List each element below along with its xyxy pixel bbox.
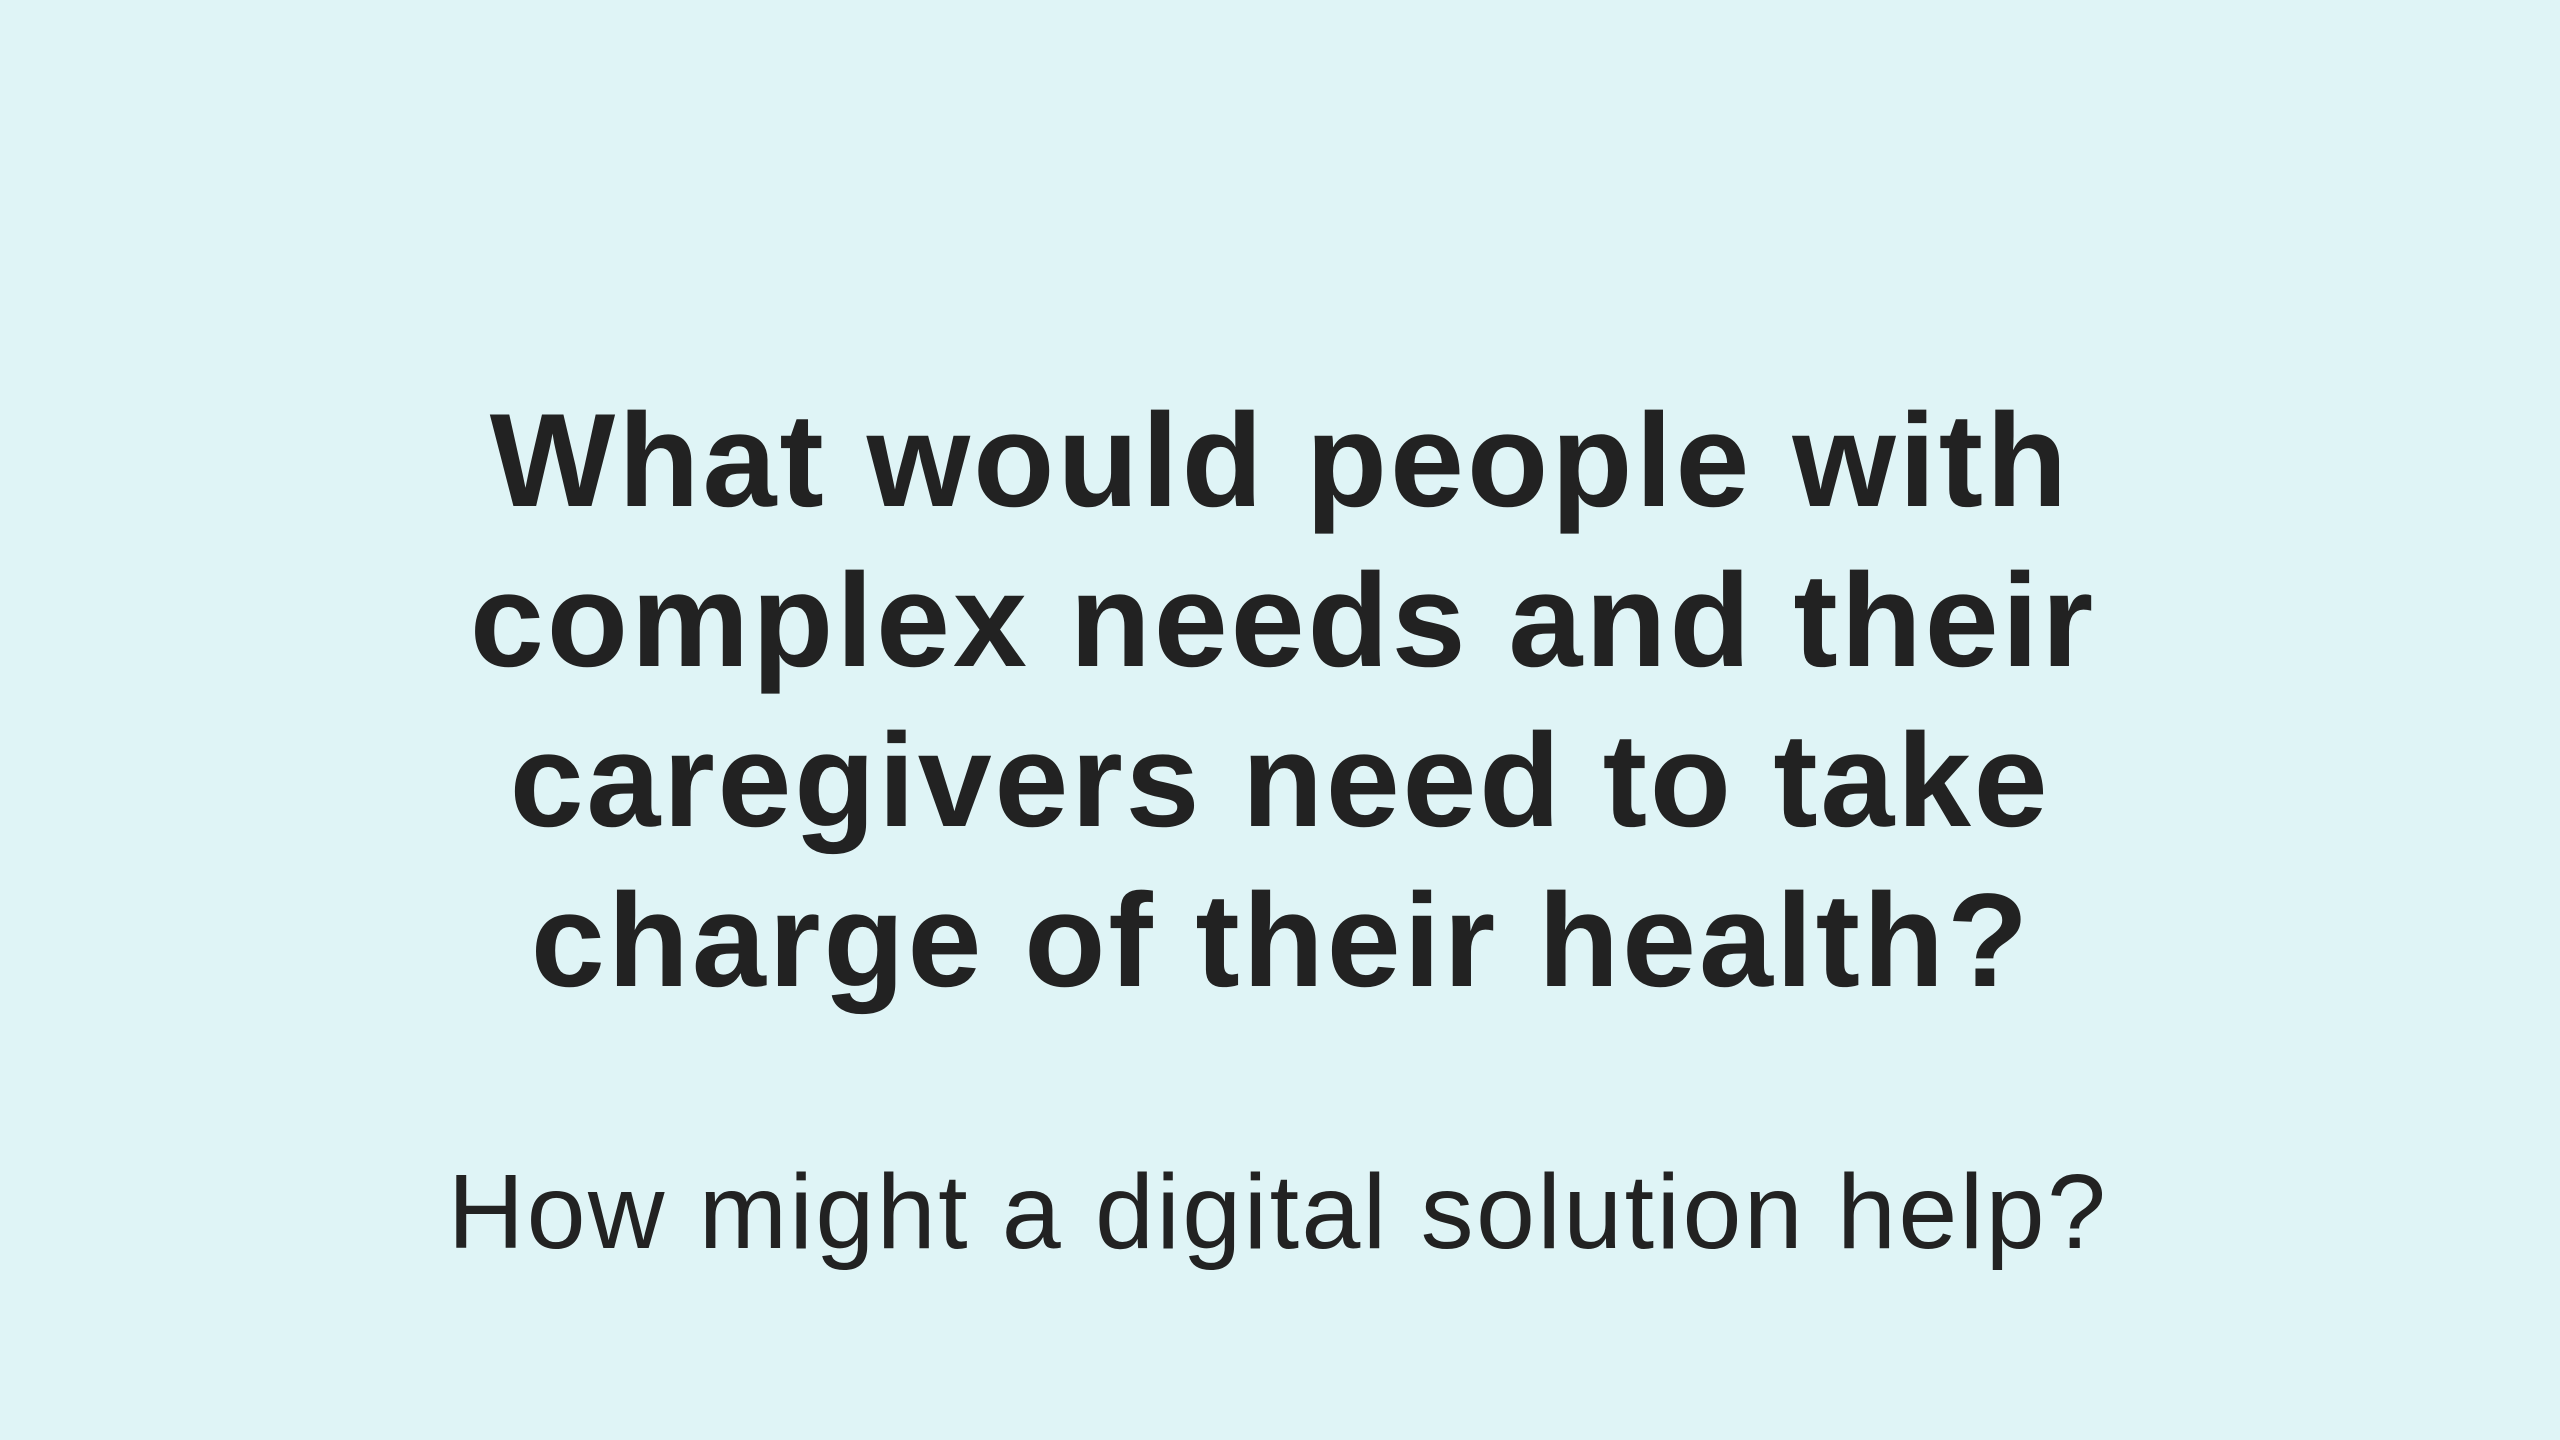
title: complex needs and their xyxy=(470,547,2096,695)
subtitle: How might a digital solution help? xyxy=(448,1153,2108,1271)
title: What would people with xyxy=(490,387,2070,535)
title xyxy=(470,387,2096,1015)
title: charge of their health? xyxy=(531,867,2031,1015)
title: caregivers need to take xyxy=(510,707,2050,855)
